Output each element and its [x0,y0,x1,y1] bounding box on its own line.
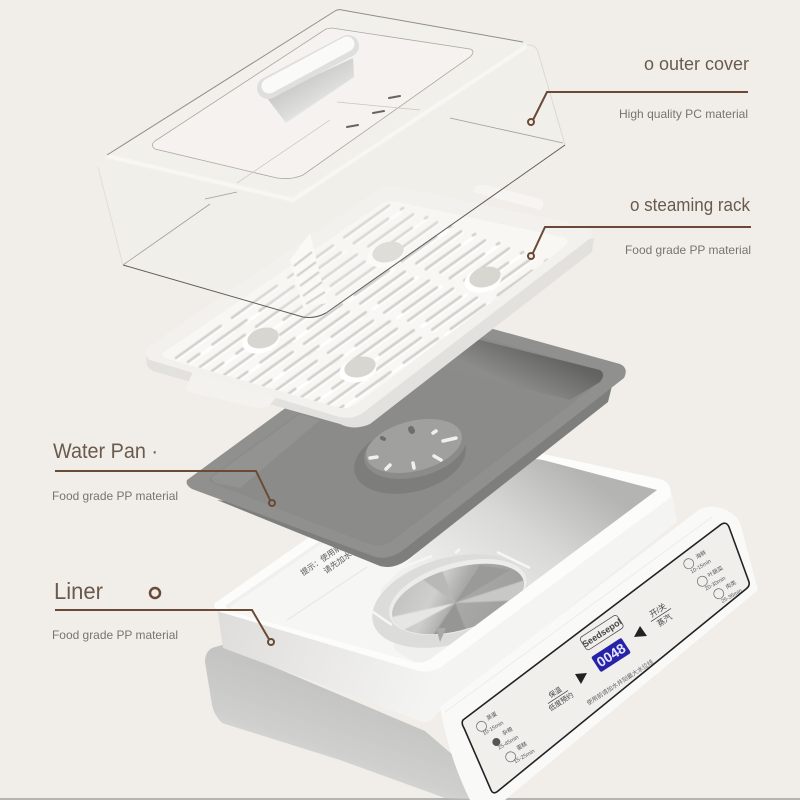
up button [634,626,647,637]
left menu icons: 蛋糕 [515,739,529,752]
down button [575,673,587,684]
caption under display: 使用前请加水并刻最大水位线 [585,658,655,707]
heating plate [372,548,530,648]
keep warm label: 保温 [547,685,563,700]
liner rim [214,435,671,672]
liner shelf [230,500,430,662]
right menu icons [681,542,743,612]
leader dot [528,119,534,125]
leader line [532,92,748,122]
base body side [205,645,505,800]
keep warm label [541,681,575,713]
control panel face [462,523,749,793]
pan inner basin [209,322,604,546]
cover edges [107,10,523,155]
ring marker [150,588,160,598]
leader dot [269,500,275,506]
pan underside [217,378,614,567]
product: transparent outer cover [98,10,565,318]
right menu icons: 25-35min [720,588,743,605]
control panel housing [440,507,758,800]
right menu icons: 10-15min [690,559,712,575]
right menu icons: 肉类 [724,578,738,591]
right menu icons: 20-30min [704,576,727,592]
rack side wall [146,238,594,428]
left menu icons: 15-25min [513,749,536,765]
digital display: 0048 [594,640,629,670]
rack floor [162,201,568,408]
liner warning text: 提示：使用前 [298,542,343,578]
description: Food grade PP material [52,489,178,503]
left menu icons: 10-15min [482,720,505,737]
heading: o steaming rack [630,195,751,215]
heading: o outer cover [644,54,749,74]
right menu icons: 叶蔬菜 [706,564,725,579]
rack feet [240,238,504,387]
label: water pan [52,440,275,506]
product: water pan [187,309,626,567]
leader dot [268,639,274,645]
pan back wall [420,330,603,400]
crinkle refraction [290,233,327,307]
power label: 蒸汽 [655,611,674,629]
liner front wall [217,495,677,722]
left menu icons [473,703,536,773]
bottom edge strip [0,798,800,800]
front handle [186,372,279,408]
leader dot [528,253,534,259]
liner warning text: 请先加水 [321,549,353,576]
label: liner [52,578,274,645]
power label: 开/关 [647,601,668,619]
description: Food grade PP material [625,243,751,257]
description: High quality PC material [619,107,748,121]
cover front face [98,45,565,318]
cover ridge highlight [107,46,527,200]
leader line [55,471,271,502]
heading: Water Pan · [53,440,158,463]
leader line [55,610,270,641]
product: base unit [205,435,758,800]
label: outer cover [528,54,749,125]
back handle [473,185,543,210]
steam diffuser disc [347,409,473,505]
left menu icons: 杂粮 [501,725,515,737]
product: steaming rack [145,185,594,428]
drainage slots [176,204,548,415]
pan left wall [211,414,320,488]
liner interior [225,448,657,662]
cover top [107,10,529,200]
cover vent slots [347,96,400,127]
pan rim [187,309,626,558]
label: steaming rack [528,195,751,259]
cover handle [267,44,354,123]
heading: Liner [54,578,103,604]
left menu icons: 蒸蛋 [485,709,499,722]
power label [645,599,677,631]
right menu icons: 海鲜 [694,548,708,561]
left menu icons: 25-45min [497,735,520,751]
keep warm label: 低度预约 [547,690,575,713]
leader line [532,227,751,255]
cover inner top panel [152,28,473,179]
description: Food grade PP material [52,628,178,642]
rack rim [145,186,592,418]
brand: Seedsepol [580,617,624,649]
